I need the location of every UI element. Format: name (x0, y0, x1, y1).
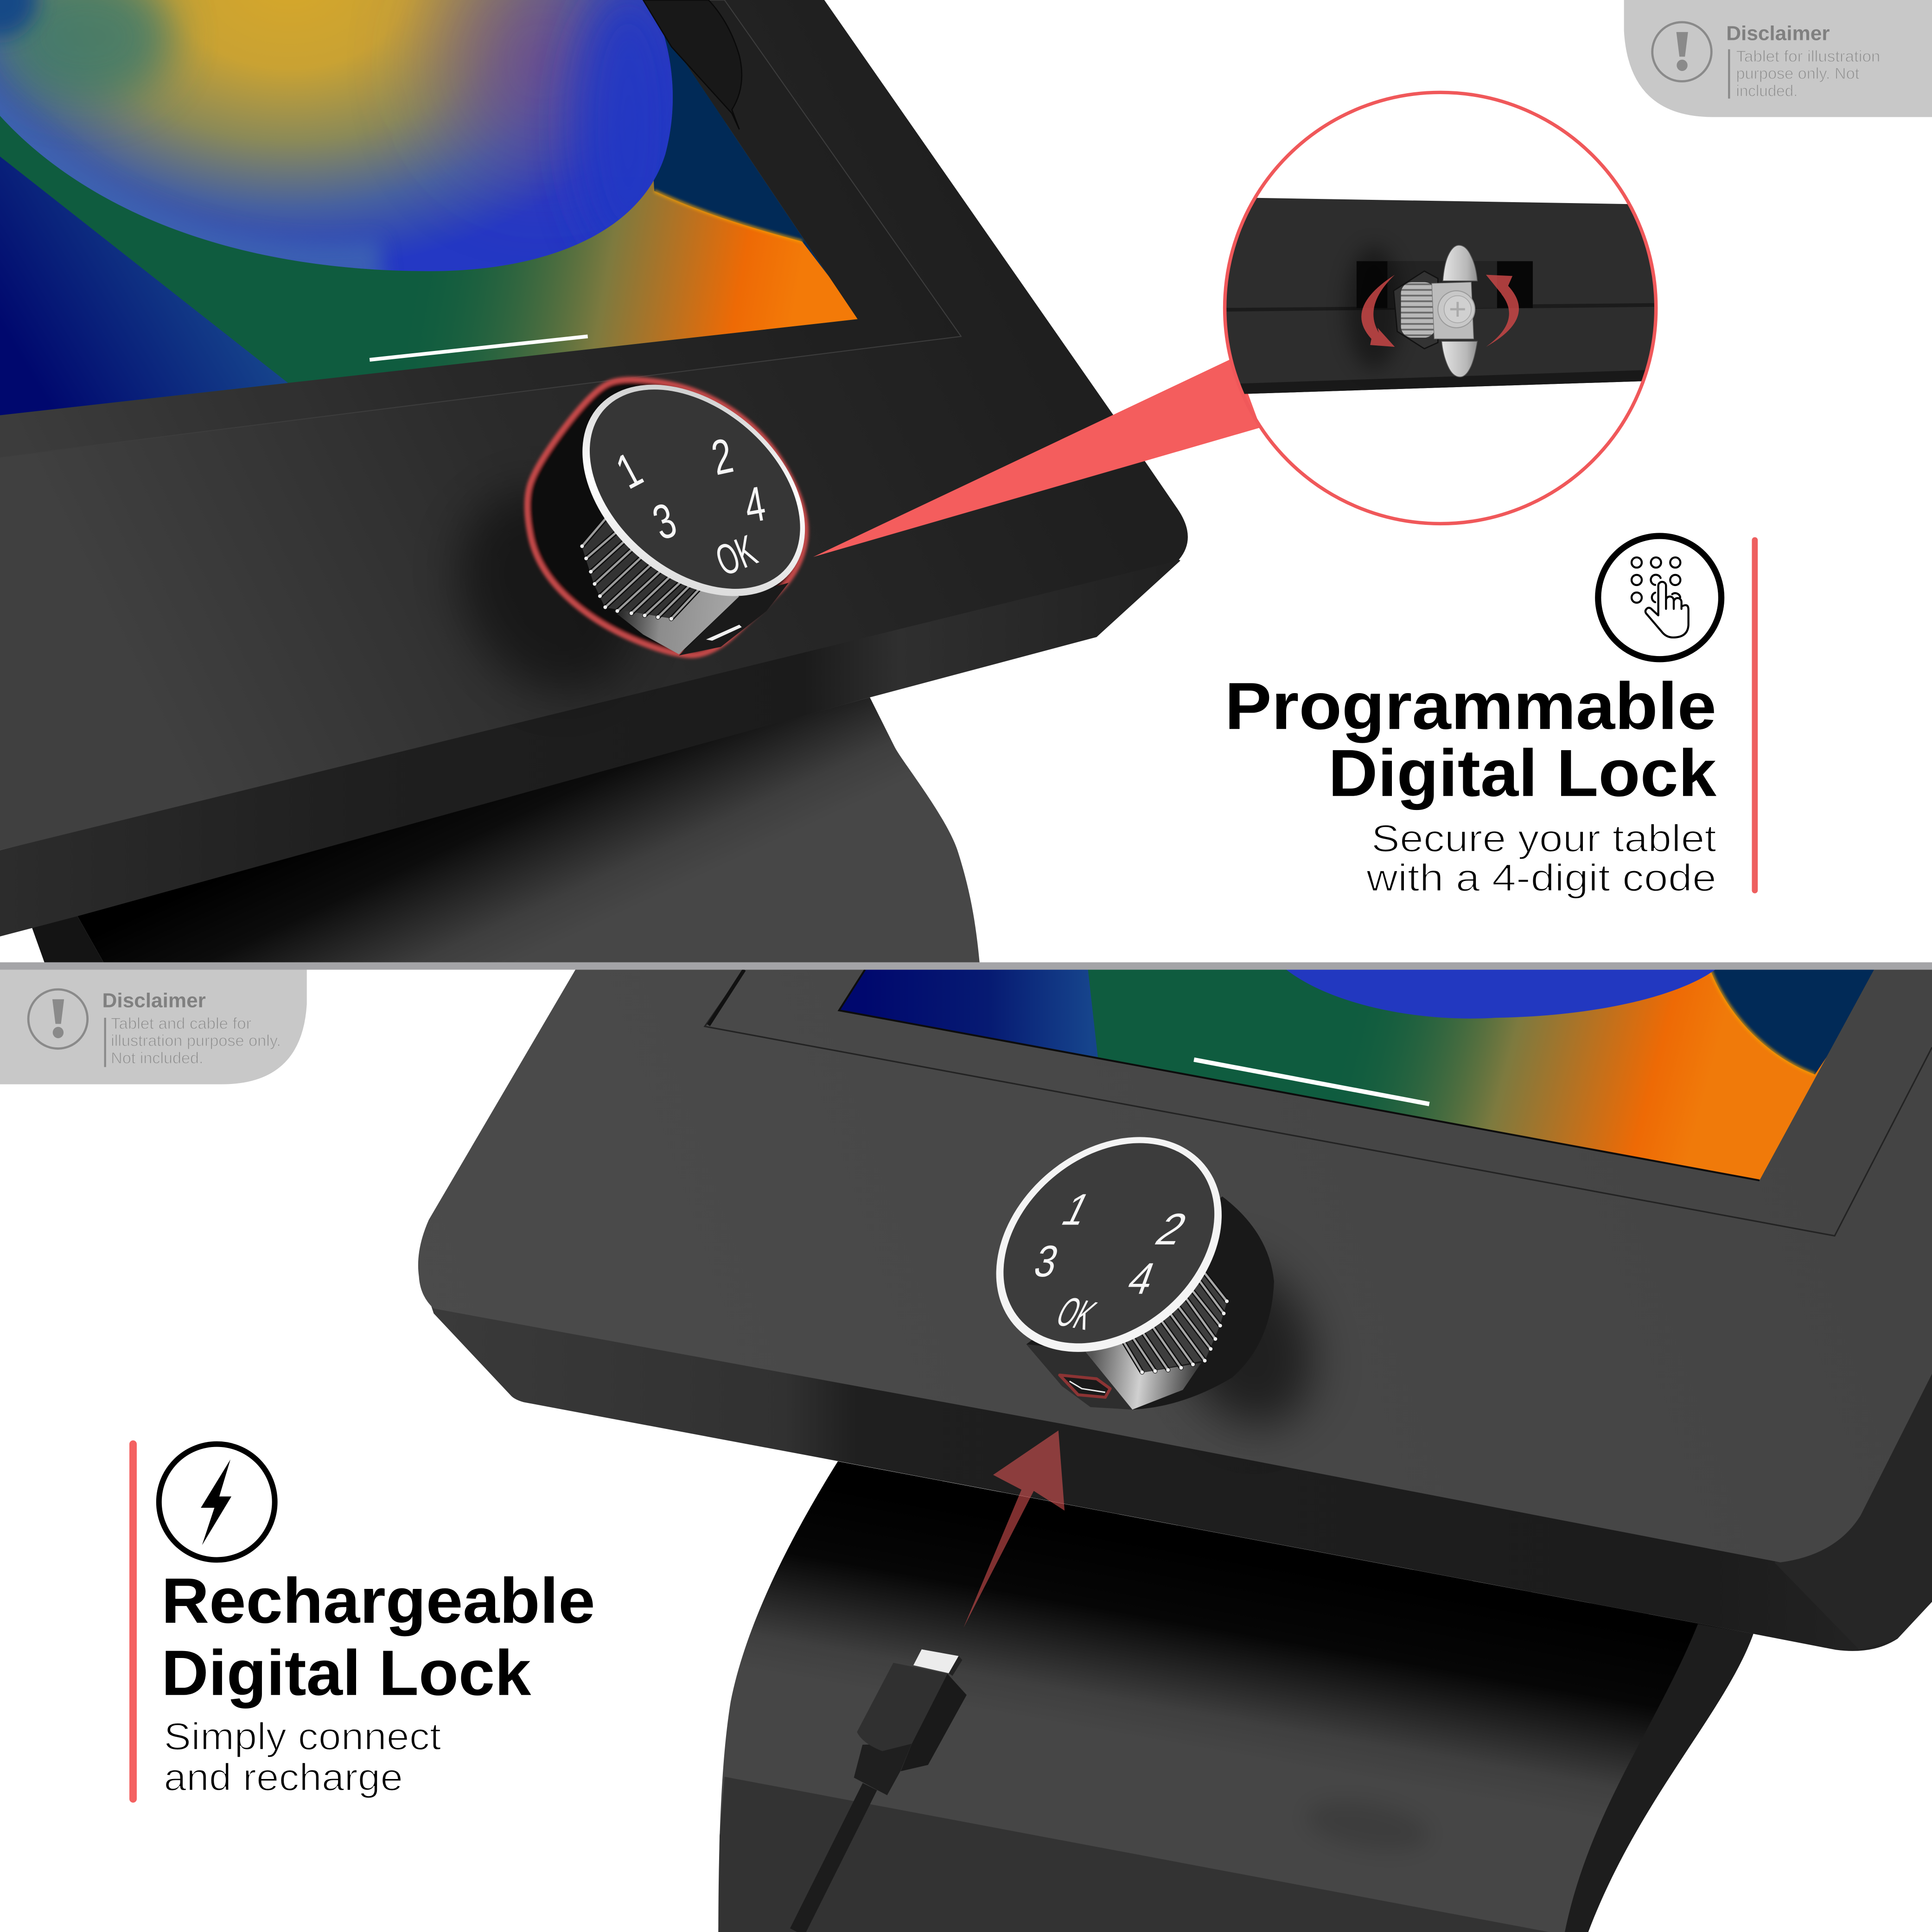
screw (1438, 291, 1475, 328)
lower enclosure face (418, 969, 1932, 1562)
lower disclaimer text: illustration purpose only. (111, 1032, 281, 1050)
tablet screen wallpaper (0, 0, 862, 419)
lower home indicator (1194, 1059, 1429, 1104)
subheading: rechargeable lock: Simply connect (164, 1715, 441, 1758)
lower keypad digits: 4 (1122, 1254, 1162, 1303)
home indicator (370, 337, 588, 360)
lower knurled ridges (1122, 1270, 1229, 1374)
keypad digits: 2 (707, 428, 738, 485)
heading: rechargeable digital lock: Rechargeable (161, 1565, 595, 1637)
disclaimer heading: Disclaimer (1726, 22, 1830, 45)
cam wing bottom (1441, 341, 1477, 377)
lower keypad digits: 2 (1148, 1205, 1195, 1254)
callout circle: mounting cam detail (1214, 92, 1657, 523)
knurled ridges (580, 511, 702, 621)
charging port highlighted (1059, 1375, 1110, 1397)
camera cutout bump (643, 0, 742, 129)
lower enclosure side (425, 1288, 1932, 1651)
lower bezel frame line (705, 969, 1932, 1236)
lower stand neck (718, 1461, 1753, 1932)
lower disclaimer text: Not included. (111, 1049, 203, 1067)
panel: programmable lock product photo (0, 0, 1188, 963)
knob face (542, 342, 846, 639)
heading: programmable digital lock: Digital Lock (1328, 736, 1716, 810)
lower digital lock knob (953, 1093, 1274, 1409)
disclaimer text: Tablet for illustration (1736, 48, 1880, 65)
disclaimer bottom (0, 969, 307, 1084)
lower screen wallpaper (826, 969, 1885, 1192)
red accent bar bottom (129, 1441, 137, 1803)
subheading: programmable lock: with a 4-digit code (1366, 856, 1716, 899)
keypad digits: OK (709, 526, 763, 585)
bezel inner frame (261, 0, 962, 425)
icon: keypad touch (1598, 536, 1722, 659)
rotation arrow left (1361, 275, 1395, 347)
knob cast shadow (423, 459, 673, 724)
charging port on top knob (706, 625, 742, 641)
heading: programmable digital lock: Programmable (1225, 669, 1716, 743)
subheading: programmable lock: Secure your tablet (1371, 817, 1716, 860)
rotation arrow right (1486, 275, 1519, 347)
lower disclaimer text (104, 1015, 281, 1067)
arrow to charging port (963, 1430, 1065, 1628)
lower knob face (953, 1093, 1264, 1396)
tablet enclosure side (0, 555, 1180, 937)
subheading: programmable lock (1366, 817, 1716, 899)
subheading: rechargeable lock (164, 1715, 441, 1798)
subheading: rechargeable lock: and recharge (164, 1756, 403, 1798)
enclosure back (1214, 197, 1657, 395)
lower disclaimer heading: Disclaimer (102, 989, 206, 1012)
lower keypad digits: 3 (1029, 1237, 1064, 1286)
red accent bar top (1752, 537, 1758, 893)
lower disclaimer text: Tablet and cable for (111, 1015, 251, 1033)
icon: warning (1652, 22, 1711, 81)
keypad digits: 1 (608, 442, 650, 499)
keypad digits (608, 428, 769, 585)
lower port facet (1027, 1344, 1132, 1409)
panel: rechargeable lock product photo (418, 969, 1932, 1932)
hex nut (1394, 271, 1438, 349)
icon: lightning bolt (159, 1444, 275, 1560)
heading: programmable digital lock (1225, 669, 1716, 810)
section divider (0, 963, 1932, 969)
callout pointer wedge (813, 357, 1261, 557)
lower keypad digits (1029, 1185, 1195, 1339)
icon: warning lower (28, 989, 88, 1049)
keypad digits: 4 (740, 476, 769, 533)
disclaimer text (1728, 48, 1880, 100)
port facet (679, 583, 789, 656)
keypad digits: 3 (646, 492, 683, 551)
tablet enclosure face (0, 0, 1188, 850)
stand neck (32, 697, 980, 963)
digital lock knob with red highlight (527, 342, 846, 656)
corner facet (1774, 1374, 1932, 1650)
lower silver collar (1084, 1339, 1201, 1409)
disclaimer top (1624, 0, 1932, 117)
circle outline (1225, 92, 1656, 523)
silver collar (613, 587, 740, 654)
heading: rechargeable digital lock (161, 1565, 595, 1709)
lower keypad digits: OK (1049, 1289, 1103, 1339)
lower knob shadow (1150, 1238, 1339, 1448)
charging cable with USB connector (797, 1649, 967, 1932)
heading: rechargeable digital lock: Digital Lock (161, 1638, 531, 1709)
lower keypad digits: 1 (1055, 1185, 1099, 1234)
threaded barrel (1401, 282, 1435, 338)
cam plate (1432, 282, 1473, 339)
disclaimer text: purpose only. Not (1736, 65, 1860, 83)
disclaimer text: included. (1736, 82, 1798, 100)
cam wing top (1443, 245, 1477, 281)
